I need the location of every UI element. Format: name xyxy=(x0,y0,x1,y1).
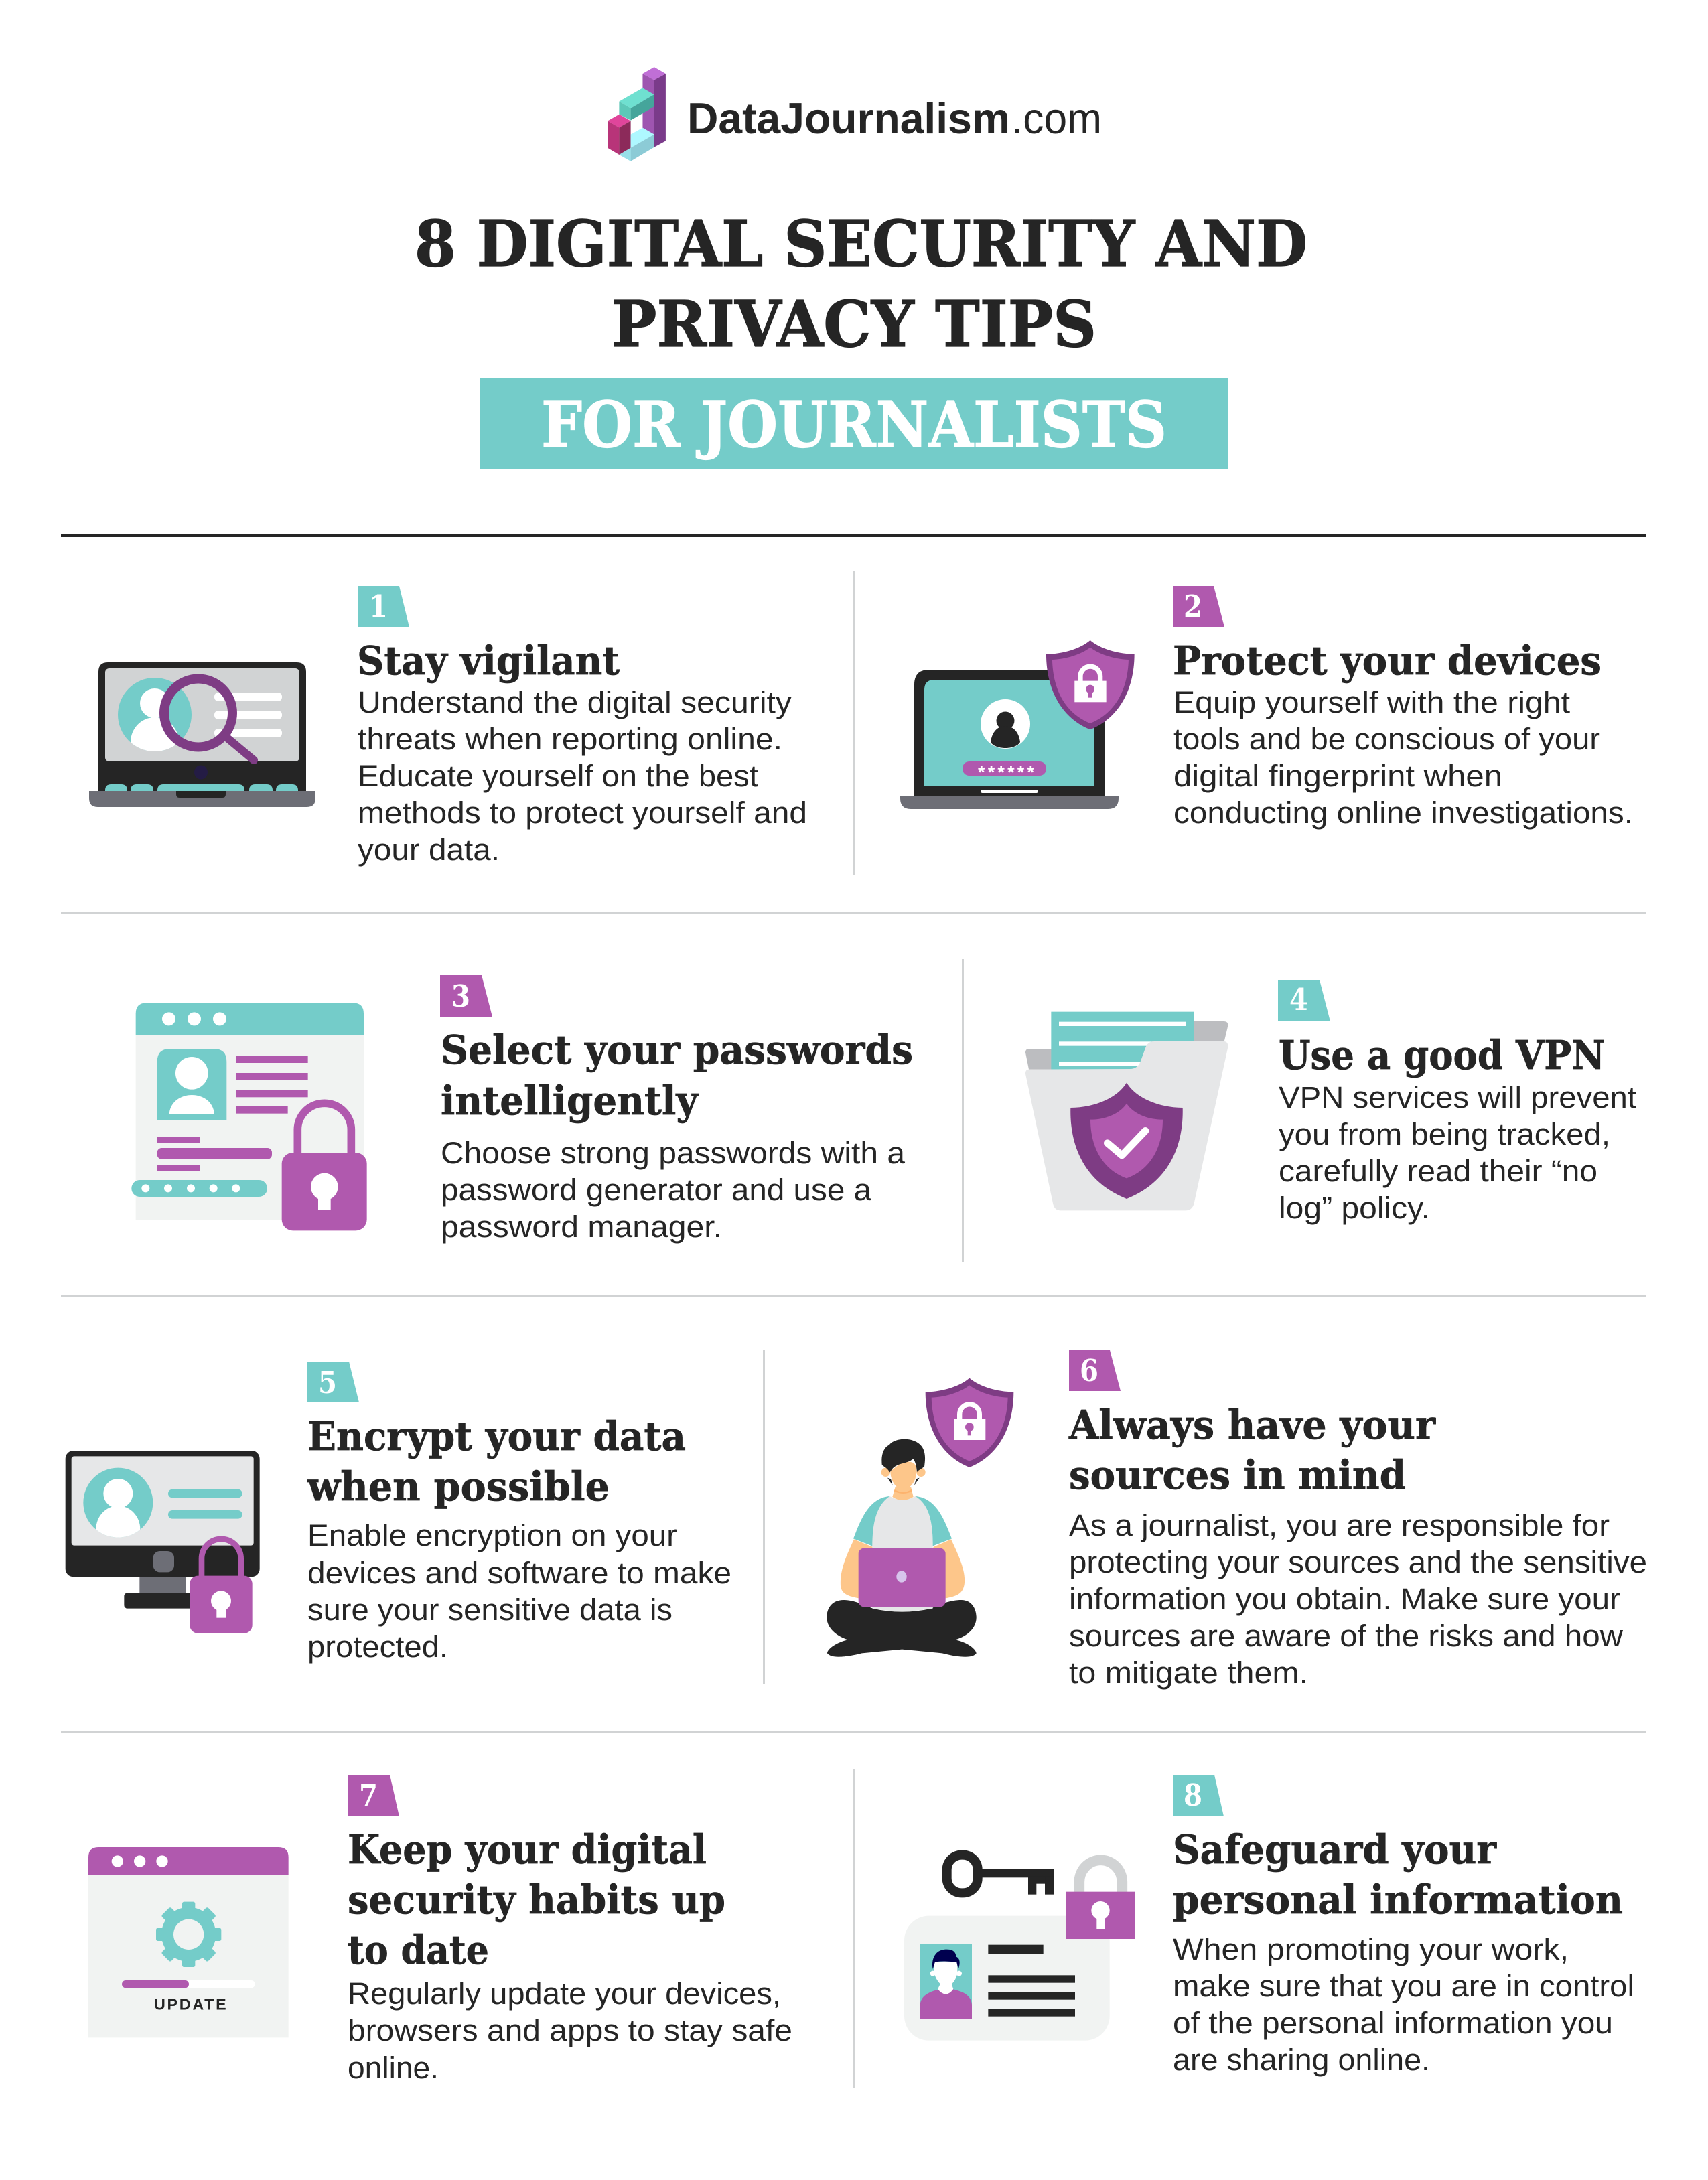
number badge 6 xyxy=(1069,1350,1121,1391)
panel: tip 4 use a good vpn xyxy=(1025,980,1637,1225)
body text: password generator and use a xyxy=(441,1173,872,1207)
icon: person with laptop and shield xyxy=(827,1378,1013,1657)
number badge 6: 6 xyxy=(1080,1353,1098,1388)
heading xyxy=(307,1413,686,1510)
heading: security habits up xyxy=(348,1877,725,1923)
heading xyxy=(441,1027,913,1124)
body text xyxy=(358,685,807,867)
body text: protected. xyxy=(307,1629,448,1664)
number badge 2: 2 xyxy=(1184,589,1202,624)
panel: tip 3 select your passwords xyxy=(131,975,913,1244)
body text: As a journalist, you are responsible for xyxy=(1069,1508,1610,1542)
logo mark xyxy=(608,67,666,161)
number badge 7: 7 xyxy=(359,1777,378,1813)
heading xyxy=(1173,1826,1623,1923)
body text: Understand the digital security xyxy=(358,685,792,719)
heading: Select your passwords xyxy=(441,1027,913,1073)
panel: tip 2 protect your devices xyxy=(900,586,1633,830)
body text: conducting online investigations. xyxy=(1173,796,1633,830)
body text: password manager. xyxy=(441,1210,722,1244)
title xyxy=(415,207,1307,362)
icon: monitor with padlock xyxy=(66,1451,260,1633)
body text xyxy=(1069,1508,1647,1690)
panel: tip 5 encrypt your data xyxy=(66,1362,731,1664)
icon: laptop with shield: ****** xyxy=(978,762,1034,782)
icon: update window with gear xyxy=(88,1847,289,2037)
number badge 7 xyxy=(348,1775,399,1816)
body text: your data. xyxy=(358,832,500,867)
body text xyxy=(1173,1932,1634,2077)
heading: Encrypt your data xyxy=(307,1413,686,1459)
logo xyxy=(608,67,1102,161)
heading xyxy=(348,1826,725,1973)
heading: intelligently xyxy=(441,1078,699,1124)
icon: profile window with padlock xyxy=(131,1003,367,1230)
body text: browsers and apps to stay safe xyxy=(348,2013,792,2047)
body text: VPN services will prevent xyxy=(1279,1080,1637,1114)
logo wordmark: .com xyxy=(1011,94,1102,143)
icon: laptop with magnifier xyxy=(89,662,315,807)
body text: Educate yourself on the best xyxy=(358,759,759,793)
logo wordmark: DataJournalism xyxy=(687,94,1010,143)
body text xyxy=(441,1136,906,1244)
heading: personal information xyxy=(1173,1877,1623,1923)
body text: of the personal information you xyxy=(1173,2006,1613,2040)
heading: to date xyxy=(348,1927,489,1973)
panel: tip 7 keep your digital security habits up to date xyxy=(88,1775,792,2085)
icon: key, padlock and id card xyxy=(904,1855,1135,2041)
body text: Enable encryption on your xyxy=(307,1518,677,1552)
panel: tip 1 stay vigilant xyxy=(89,586,807,867)
icon: update window with gear: UPDATE xyxy=(154,1996,226,2013)
panel: tip 6 always have your sources in mind xyxy=(827,1350,1647,1690)
body text xyxy=(348,1976,792,2085)
number badge 8 xyxy=(1173,1775,1224,1816)
body text xyxy=(307,1518,731,1664)
body text: Regularly update your devices, xyxy=(348,1976,781,2011)
body text: threats when reporting online. xyxy=(358,722,782,756)
body text: methods to protect yourself and xyxy=(358,796,807,830)
heading: Always have your xyxy=(1068,1402,1436,1448)
body text: Choose strong passwords with a xyxy=(441,1136,906,1170)
heading: Protect your devices xyxy=(1173,638,1602,684)
title: 8 DIGITAL SECURITY AND xyxy=(415,207,1307,281)
body text: log” policy. xyxy=(1279,1191,1430,1225)
heading: Keep your digital xyxy=(348,1826,707,1873)
number badge 2 xyxy=(1173,586,1224,627)
heading: Use a good VPN xyxy=(1279,1032,1605,1078)
number badge 3: 3 xyxy=(451,978,470,1014)
heading: Stay vigilant xyxy=(357,638,620,684)
body text: make sure that you are in control xyxy=(1173,1969,1634,2003)
number badge 3 xyxy=(440,975,492,1017)
heading: sources in mind xyxy=(1069,1452,1406,1498)
body text: Equip yourself with the right xyxy=(1173,685,1571,719)
body text: digital fingerprint when xyxy=(1173,759,1502,793)
icon: folder with shield xyxy=(1025,1012,1228,1210)
heading: Safeguard your xyxy=(1173,1826,1497,1873)
number badge 8: 8 xyxy=(1184,1777,1202,1813)
body text: are sharing online. xyxy=(1173,2043,1430,2077)
body text: tools and be conscious of your xyxy=(1173,722,1600,756)
body text: protecting your sources and the sensitive xyxy=(1069,1545,1647,1579)
body text: information you obtain. Make sure your xyxy=(1069,1582,1620,1616)
body text: online. xyxy=(348,2051,439,2085)
body text: to mitigate them. xyxy=(1069,1656,1308,1690)
subtitle banner: FOR JOURNALISTS xyxy=(541,388,1167,462)
title: PRIVACY TIPS xyxy=(612,287,1096,362)
body text: devices and software to make xyxy=(307,1556,731,1590)
number badge 1: 1 xyxy=(369,589,388,624)
heading: when possible xyxy=(307,1463,610,1510)
body text: carefully read their “no xyxy=(1279,1154,1597,1188)
number badge 5: 5 xyxy=(318,1365,337,1400)
number badge 1 xyxy=(358,586,409,627)
body text: sources are aware of the risks and how xyxy=(1069,1619,1624,1653)
body text: you from being tracked, xyxy=(1279,1117,1610,1151)
icon: laptop with shield xyxy=(900,640,1135,809)
body text xyxy=(1173,685,1633,830)
heading xyxy=(1068,1402,1436,1498)
number badge 4: 4 xyxy=(1289,982,1308,1017)
body text: sure your sensitive data is xyxy=(307,1593,672,1627)
body text xyxy=(1279,1080,1637,1225)
number badge 4 xyxy=(1278,980,1330,1021)
number badge 5 xyxy=(307,1362,359,1402)
panel: tip 8 safeguard your personal information xyxy=(904,1775,1634,2077)
body text: When promoting your work, xyxy=(1173,1932,1569,1966)
